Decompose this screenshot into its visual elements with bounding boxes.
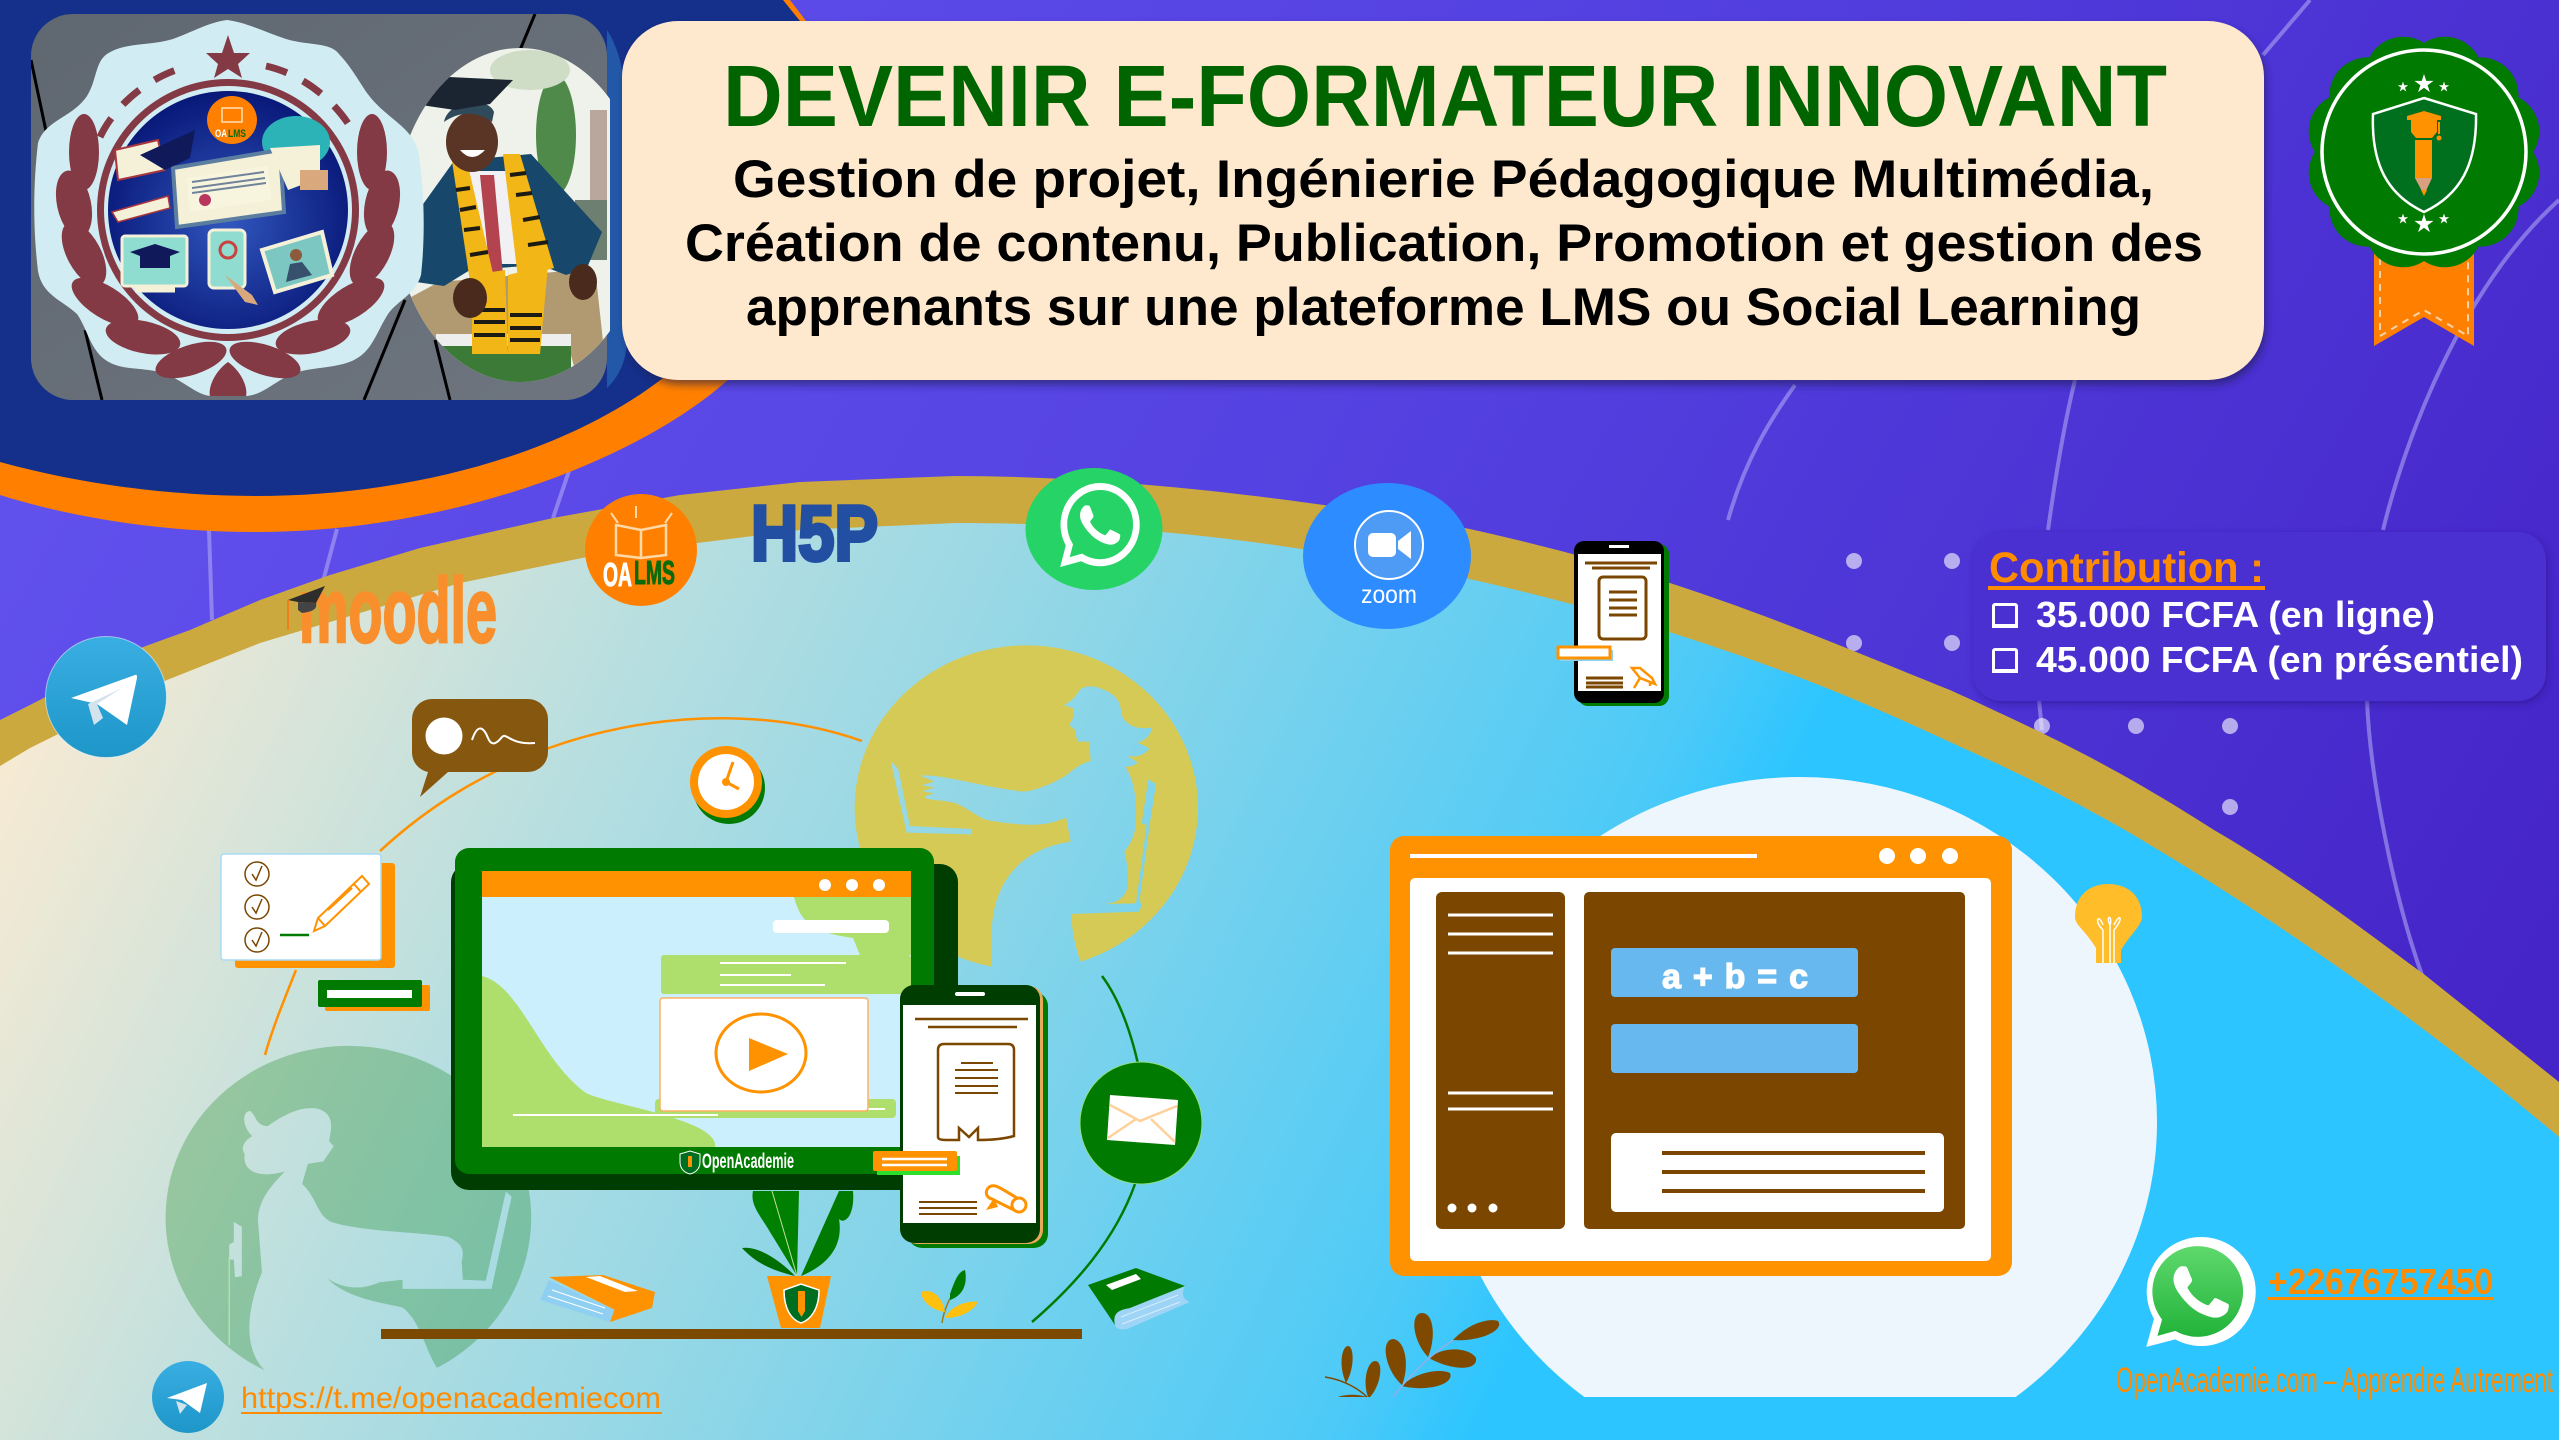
subtitle: apprenants sur une plateforme LMS ou Social Learning [746, 278, 2141, 337]
phone with hand [209, 230, 258, 305]
monitor with cap [122, 236, 187, 290]
clock [690, 746, 765, 824]
whatsapp logo bottom right [2146, 1237, 2256, 1347]
central gradient dome [0, 523, 2559, 1440]
tablet with teacher [262, 232, 332, 292]
green label [318, 980, 430, 1011]
open book [112, 140, 170, 222]
H5P logo: H5P [751, 489, 878, 577]
main content: a + b = c [1662, 958, 1808, 996]
openacademie brand [680, 1150, 794, 1174]
envelope circle [1080, 1062, 1202, 1184]
decorative dots [1846, 553, 2238, 815]
woman silhouette circle [166, 1046, 531, 1370]
moodle logo: moodle [299, 560, 497, 662]
zoom icon: zoom [1361, 581, 1417, 609]
telegram icon top-left [46, 636, 166, 758]
shelf [381, 1329, 1082, 1339]
subtitle: Création de contenu, Publication, Promotion et gestion des [685, 214, 2203, 273]
man silhouette circle [855, 645, 1198, 967]
phone number: +22676757450 [2268, 1261, 2493, 1302]
thin orange arc [265, 718, 862, 1055]
speech bubble [412, 699, 548, 797]
monitor [451, 848, 958, 1190]
pencil cap icon [2407, 111, 2442, 196]
OA badge: OA [215, 128, 227, 140]
video card [660, 998, 868, 1111]
whatsapp circle icon [1026, 468, 1162, 590]
background lavender curves [209, 0, 2559, 975]
brown leaves [1325, 1313, 1499, 1397]
title panel [622, 21, 2266, 385]
OA LMS logo [585, 494, 697, 606]
main title: DEVENIR E-FORMATEUR INNOVANT [723, 48, 2167, 145]
seal badge [2300, 28, 2548, 346]
orange book [540, 1275, 655, 1322]
contribution panel [1973, 532, 2548, 704]
emblem [34, 20, 424, 396]
light bulb [2075, 884, 2142, 963]
OA LMS logo: OA [603, 556, 632, 593]
OA LMS logo: LMS [634, 554, 675, 591]
checklist card [221, 854, 395, 968]
bottom telegram icon [152, 1361, 224, 1433]
small phone icon [1558, 541, 1669, 706]
small plant [921, 1270, 978, 1323]
book with hand [270, 145, 328, 190]
main content [1584, 892, 1965, 1229]
subtitle [685, 150, 2203, 337]
zoom icon [1303, 483, 1471, 629]
telegram link: https://t.me/openacademiecom [241, 1382, 661, 1415]
logo and photo card [31, 14, 627, 400]
price in person: 45.000 FCFA (en présentiel) [2036, 639, 2523, 680]
OA badge: LMS [228, 128, 246, 140]
sidebar [1436, 892, 1565, 1229]
OA badge [207, 96, 257, 144]
globe [262, 116, 330, 168]
contribution heading: Contribution : [1989, 544, 2264, 592]
mortarboard [140, 130, 195, 170]
moodle logo [288, 560, 497, 662]
white ellipse behind browser window [1480, 777, 2157, 1397]
thin green arc [1032, 976, 1143, 1322]
subtitle: Gestion de projet, Ingénierie Pédagogique Multimédia, [733, 150, 2154, 209]
top-left navy shape with orange ring [0, 0, 806, 532]
ribbon [2374, 250, 2474, 346]
phone [873, 985, 1048, 1248]
gold arc band [0, 476, 2559, 1440]
graduate photo [410, 48, 610, 382]
green book [1088, 1268, 1190, 1329]
browser window [1390, 836, 2012, 1276]
plant on shelf [742, 1191, 853, 1328]
stars [2398, 74, 2449, 232]
tablet with diploma [173, 150, 284, 227]
price online: 35.000 FCFA (en ligne) [2036, 594, 2435, 635]
openacademie brand: OpenAcademie [702, 1150, 794, 1173]
